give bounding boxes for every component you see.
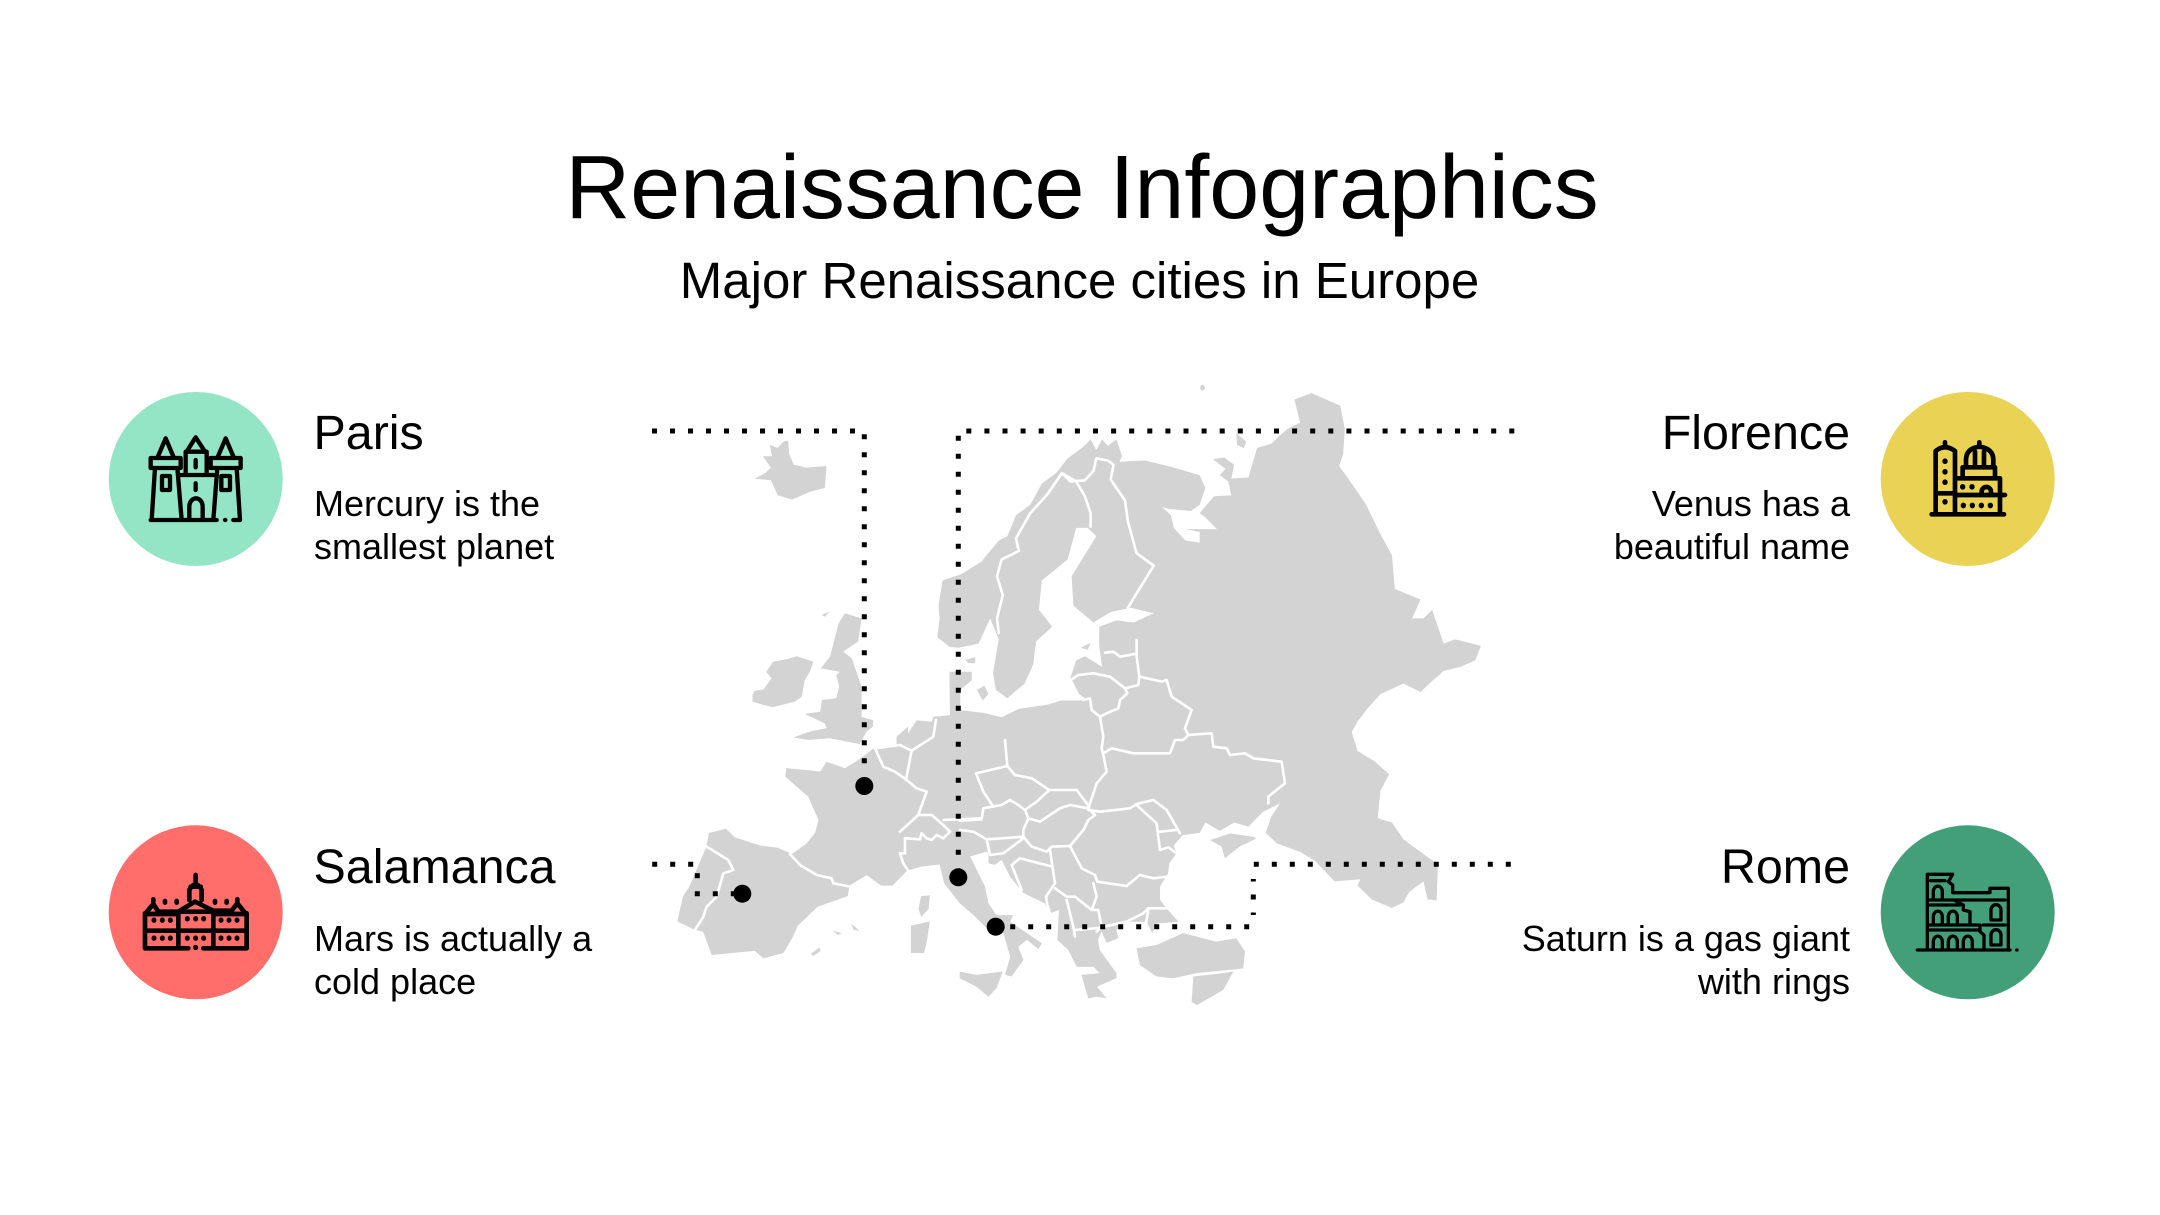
dotted connector: Paris xyxy=(652,431,864,764)
islands xyxy=(753,433,1256,1005)
location dot: Rome xyxy=(987,918,1005,936)
heading: Florence: Florence xyxy=(1662,406,1850,460)
icon: cathedral xyxy=(1932,442,2005,514)
icon circle: Rome xyxy=(1881,825,2055,999)
western borders xyxy=(695,720,982,930)
central and Balkan borders xyxy=(960,740,1180,937)
icon: castle xyxy=(151,437,241,520)
icon: palace xyxy=(145,875,247,948)
description: Florence: Venus has a xyxy=(1652,483,1851,524)
icon circle: Paris xyxy=(109,392,283,566)
description: Salamanca: cold place xyxy=(314,961,476,1002)
description: Paris: Mercury is the xyxy=(314,483,540,524)
subtitle: Major Renaissance cities in Europe xyxy=(680,252,1479,309)
mainland Europe xyxy=(677,393,1481,998)
description: Paris: smallest planet xyxy=(314,526,554,567)
panel: Salamanca xyxy=(109,825,593,1002)
icon circle: Salamanca xyxy=(109,825,283,999)
panel: Florence xyxy=(1614,392,2055,567)
icon: colosseum xyxy=(1917,874,2017,950)
dotted connector: Rome xyxy=(1010,864,1512,927)
panel: Paris xyxy=(109,392,554,567)
location dot: Salamanca xyxy=(733,885,751,903)
Baltic, Belarus and Ukraine borders xyxy=(1072,640,1285,808)
location dot: Florence xyxy=(949,868,967,886)
dotted connector: Salamanca xyxy=(652,864,737,894)
heading: Paris: Paris xyxy=(314,406,424,460)
Nordic borders xyxy=(997,458,1154,633)
description: Rome: Saturn is a gas giant xyxy=(1522,918,1850,959)
map of Europe xyxy=(677,385,1481,1005)
icon circle: Florence xyxy=(1881,392,2055,566)
heading: Salamanca: Salamanca xyxy=(314,840,556,894)
land masses xyxy=(677,385,1481,1005)
description: Florence: beautiful name xyxy=(1614,526,1850,567)
dotted connector: Florence xyxy=(958,431,1515,855)
title: Renaissance Infographics xyxy=(565,138,1599,238)
location dot: Paris xyxy=(855,777,873,795)
heading: Rome: Rome xyxy=(1721,840,1850,894)
description: Rome: with rings xyxy=(1697,961,1850,1002)
description: Salamanca: Mars is actually a xyxy=(314,918,593,959)
panel: Rome xyxy=(1522,825,2055,1002)
